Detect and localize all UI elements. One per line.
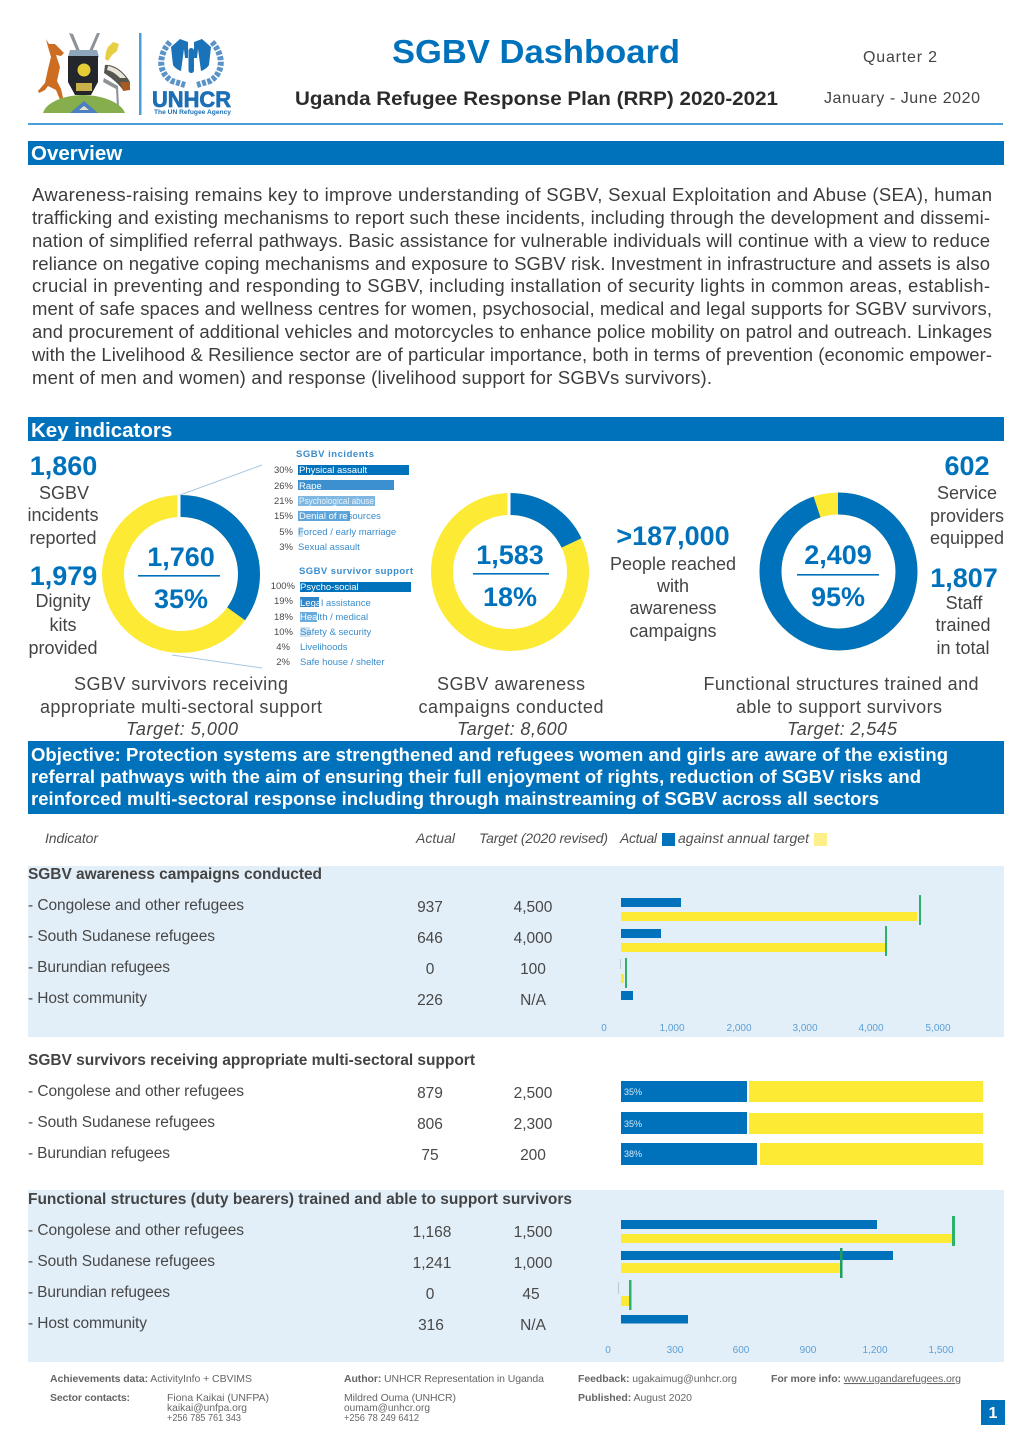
panel: awareness campaigns [28, 866, 1004, 1037]
caption: awareness: Target: 8,600 [457, 719, 567, 739]
caption: functional structures [704, 674, 978, 739]
chart: SGBV survivor support: SGBV survivor support [299, 566, 414, 577]
rows: awareness campaigns: - Host community [28, 990, 147, 1007]
chart: SGBV incidents: Physical assault [299, 465, 367, 476]
chart: SGBV incidents: 30% [274, 465, 294, 476]
chart: SGBV incidents: 26% [274, 481, 294, 492]
rows: survivors support: 200 [520, 1147, 546, 1164]
people reached indicator: >187,000 [616, 521, 730, 551]
bar chart: functional structures: 0 [605, 1345, 611, 1356]
right indicators: providers [930, 506, 1004, 526]
caption: functional structures: Target: 2,545 [787, 719, 898, 739]
chart: SGBV survivor support: Safety & security [300, 627, 372, 638]
donut: awareness campaigns 18%: 1,583 [476, 540, 544, 570]
footer credits: kaikai@unfpa.org [167, 1402, 247, 1414]
rows: awareness campaigns: 4,500 [514, 899, 553, 916]
chart: SGBV survivor support: 19% [274, 596, 294, 607]
objective banner: reinforced multi-sectoral response including through mainstreaming of SGBV across all sectors [31, 788, 879, 809]
chart: SGBV incidents: Psychological abuse [299, 496, 374, 507]
caption: survivors: Target: 5,000 [126, 719, 238, 739]
left indicators: provided [28, 638, 98, 658]
panel: functional structures [28, 1190, 1004, 1362]
chart: SGBV survivor support: 2% [276, 657, 291, 668]
rows: functional structures: - South Sudanese refugees [28, 1253, 215, 1270]
rows: awareness campaigns: - Burundian refugees [28, 959, 170, 976]
subtitle: Uganda Refugee Response Plan (RRP) 2020-2021 [295, 88, 778, 110]
objective banner: Objective: Protection systems are strengthened and refugees women and girls are aware of the existing [31, 744, 948, 765]
rows: awareness campaigns: 100 [520, 961, 546, 978]
chart: SGBV survivor support: Livelihoods [300, 642, 348, 653]
left indicators: Dignity [35, 591, 91, 611]
panel: survivors support: SGBV survivors receiving appropriate multi-sectoral support [28, 1052, 475, 1069]
rows: functional structures: 1,168 [413, 1224, 451, 1241]
chart: SGBV incidents [274, 449, 409, 553]
page header [38, 33, 980, 116]
chart: SGBV survivor support: Legal assistance [300, 598, 371, 609]
people reached indicator: People reached [610, 554, 736, 574]
quarter label: Quarter 2 [863, 49, 937, 66]
table header and legend [45, 830, 827, 846]
caption: awareness: campaigns conducted [418, 697, 604, 717]
bar chart: awareness campaigns: 2,000 [726, 1023, 752, 1034]
footer credits: Author: UNHCR Representation in Uganda [344, 1373, 544, 1385]
rows: awareness campaigns: N/A [520, 992, 547, 1009]
rows: functional structures: 0 [426, 1286, 435, 1303]
footer credits: Mildred Ouma (UNHCR) [344, 1392, 456, 1404]
left indicators: SGBV [39, 483, 89, 503]
people reached indicator: campaigns [629, 621, 717, 641]
footer credits: Published: August 2020 [578, 1392, 692, 1404]
rows: survivors support: 806 [417, 1116, 443, 1133]
chart: SGBV incidents: 21% [274, 496, 294, 507]
overview heading [28, 141, 1004, 165]
table header and legend: Indicator [45, 830, 99, 846]
donut: functional structures 95%: 95% [811, 582, 865, 612]
left indicators: 1,860 [30, 451, 97, 481]
overview text: reliance on negative coping mechanisms and exposure to SGBV risk. Investment in infrastructure and assets is also [32, 253, 990, 274]
footer credits: For more info: www.ugandarefugees.org [771, 1373, 961, 1385]
chart: SGBV survivor support: 4% [276, 642, 291, 653]
stacked bar chart: survivors support: 35% [624, 1087, 642, 1097]
rows: functional structures: 1,500 [514, 1224, 553, 1241]
donut: awareness campaigns 18% [442, 493, 578, 640]
rows: functional structures: - Congolese and other refugees [28, 1222, 244, 1239]
donut: survivors 35%: 35% [154, 584, 208, 614]
rows: survivors support: 879 [417, 1085, 443, 1102]
chart: SGBV incidents: SGBV incidents [296, 449, 374, 460]
stacked bar chart: survivors support [621, 1081, 983, 1165]
bar chart: awareness campaigns: 3,000 [792, 1023, 818, 1034]
table header and legend: Target (2020 revised) [479, 830, 608, 846]
rows: awareness campaigns: 646 [417, 930, 443, 947]
logo: Uganda coat of arms [38, 33, 130, 113]
bar chart: functional structures [605, 1216, 955, 1356]
rows: survivors support: 75 [421, 1147, 439, 1164]
bar chart: awareness campaigns: 4,000 [858, 1023, 884, 1034]
people reached indicator: awareness [629, 598, 717, 618]
connector lines [172, 465, 262, 668]
rows: awareness campaigns: - Congolese and other refugees [28, 897, 244, 914]
rows: functional structures: 1,241 [413, 1255, 451, 1272]
chart: SGBV survivor support: 18% [274, 612, 294, 623]
footer credits: Fiona Kaikai (UNFPA) [167, 1392, 269, 1404]
logo: UNHCR [152, 39, 232, 116]
overview text: and procurement of additional vehicles and motorcycles to enhance police mobility on patrol and outreach. Linkages [32, 321, 992, 342]
right indicators: Staff [946, 593, 983, 613]
title: SGBV Dashboard [392, 33, 680, 70]
donut: survivors 35%: 1,760 [147, 542, 215, 572]
rows: survivors support: 2,300 [514, 1116, 553, 1133]
overview text: trafficking and existing mechanisms to report such these incidents, including through the development and dissemi- [32, 207, 990, 228]
left indicators [27, 451, 99, 658]
objective banner [28, 741, 1004, 814]
donut: awareness campaigns 18%: 18% [483, 582, 537, 612]
overview text: ment of men and women) and response (livelihood support for SGBVs survivors). [32, 367, 712, 388]
footer credits [50, 1373, 961, 1424]
right indicators [930, 451, 1004, 658]
logo: UNHCR: UNHCR [152, 87, 231, 112]
left indicators: 1,979 [30, 561, 97, 591]
footer credits: Sector contacts: [50, 1392, 130, 1404]
rows: functional structures: - Burundian refugees [28, 1284, 170, 1301]
people reached indicator: with [656, 576, 689, 596]
bar chart: functional structures: 900 [800, 1345, 817, 1356]
chart: SGBV survivor support: 100% [271, 581, 296, 592]
donut: functional structures 95%: 2,409 [804, 540, 872, 570]
key indicators heading: Key indicators [31, 419, 172, 442]
rows: awareness campaigns: 937 [417, 899, 443, 916]
chart: SGBV incidents: 5% [279, 527, 294, 538]
caption: awareness: SGBV awareness [437, 674, 585, 694]
bar chart: functional structures: 300 [667, 1345, 684, 1356]
rows: functional structures: - Host community [28, 1315, 147, 1332]
footer credits: Achievements data: ActivityInfo + CBVIMS [50, 1373, 252, 1385]
rows: awareness campaigns: 0 [426, 961, 435, 978]
footer credits: Feedback: ugakaimug@unhcr.org [578, 1373, 737, 1385]
overview text: nation of simplified referral pathways. Basic assistance for vulnerable individuals will continue with a view to reduce [32, 230, 990, 251]
key indicators heading [28, 417, 1004, 442]
caption: survivors [40, 674, 322, 739]
overview text [31, 184, 992, 388]
left indicators: reported [29, 528, 97, 548]
right indicators: 602 [944, 451, 990, 481]
bar chart: awareness campaigns: 5,000 [925, 1023, 951, 1034]
overview text: with the Livelihood & Resilience sector are of particular importance, both in terms of prevention (economic empower- [31, 344, 992, 365]
right indicators: 1,807 [930, 563, 998, 593]
chart: SGBV incidents: 15% [274, 511, 294, 522]
rows: survivors support: 2,500 [514, 1085, 553, 1102]
chart: SGBV incidents: Rape [299, 481, 322, 492]
chart: SGBV survivor support: Health / medical [300, 612, 368, 623]
overview text: crucial in preventing and responding to SGBV, including installation of security lights in common areas, establish- [32, 275, 990, 296]
rows: survivors support: - South Sudanese refugees [28, 1114, 215, 1131]
rows: awareness campaigns [28, 897, 553, 1009]
overview text: ment of safe spaces and wellness centres for women, psychosocial, medical and legal supports for SGBV survivors, [32, 298, 992, 319]
rows: awareness campaigns: 226 [417, 992, 443, 1009]
rows: awareness campaigns: 4,000 [514, 930, 553, 947]
bar chart: awareness campaigns: 0 [601, 1023, 607, 1034]
donut: survivors 35% [113, 495, 249, 642]
rows: survivors support [28, 1083, 553, 1164]
chart: SGBV survivor support: Psycho-social [300, 582, 359, 593]
donut: functional structures 95% [770, 504, 906, 640]
rows: functional structures: 316 [418, 1317, 444, 1334]
footer credits: oumam@unhcr.org [344, 1402, 430, 1414]
chart: SGBV incidents: Sexual assault [298, 542, 360, 553]
stacked bar chart: survivors support: 35% [624, 1119, 642, 1129]
bar chart: functional structures: 1,500 [928, 1345, 954, 1356]
chart: SGBV survivor support [271, 566, 414, 668]
rows: functional structures: N/A [520, 1317, 547, 1334]
chart: SGBV incidents: Denial of resources [299, 511, 381, 522]
bar chart: functional structures: 1,200 [862, 1345, 888, 1356]
table header and legend: Actual [619, 830, 658, 846]
panel: awareness campaigns: SGBV awareness campaigns conducted [28, 866, 322, 883]
caption: survivors: appropriate multi-sectoral support [40, 697, 322, 717]
bar chart: functional structures: 600 [733, 1345, 750, 1356]
overview heading: Overview [31, 142, 122, 165]
rows: functional structures: 1,000 [514, 1255, 553, 1272]
rows: functional structures [28, 1222, 553, 1334]
logo: UNHCR: The UN Refugee Agency [154, 110, 232, 116]
left indicators: kits [50, 615, 76, 635]
chart: SGBV survivor support: Safe house / shelter [300, 657, 384, 668]
page number: 1 [989, 1405, 998, 1422]
objective banner: referral pathways with the aim of ensuring their full enjoyment of rights, reduction of SGBV risks and [31, 766, 921, 787]
left indicators: incidents [27, 505, 99, 525]
page number [981, 1400, 1005, 1425]
rows: survivors support: - Congolese and other refugees [28, 1083, 244, 1100]
chart: SGBV incidents: Forced / early marriage [298, 527, 396, 538]
footer credits: +256 78 249 6412 [344, 1412, 419, 1424]
caption: awareness [418, 674, 604, 739]
rows: functional structures: 45 [522, 1286, 540, 1303]
footer credits: +256 785 761 343 [167, 1412, 241, 1424]
table header and legend: Actual [415, 830, 456, 846]
caption: functional structures: able to support survivors [736, 697, 942, 717]
rows: awareness campaigns: - South Sudanese refugees [28, 928, 215, 945]
panel: survivors support [28, 1052, 983, 1165]
bar chart: awareness campaigns: 1,000 [659, 1023, 685, 1034]
period label: January - June 2020 [824, 90, 980, 107]
caption: functional structures: Functional structures trained and [704, 674, 978, 694]
right indicators: Service [937, 483, 997, 503]
right indicators: trained [935, 615, 991, 635]
panel: functional structures: Functional structures (duty bearers) trained and able to support survivors [28, 1191, 572, 1208]
table header and legend: against annual target [678, 830, 810, 846]
right indicators: in total [936, 638, 990, 658]
caption: survivors: SGBV survivors receiving [74, 674, 288, 694]
bar chart: awareness campaigns [601, 895, 951, 1034]
stacked bar chart: survivors support: 38% [624, 1149, 642, 1159]
logo divider [139, 33, 142, 115]
chart: SGBV incidents: 3% [279, 542, 294, 553]
chart: SGBV survivor support: 10% [274, 627, 294, 638]
overview text: Awareness-raising remains key to improve understanding of SGBV, Sexual Exploitation and Abuse (SEA), human [32, 184, 992, 205]
rows: survivors support: - Burundian refugees [28, 1145, 170, 1162]
right indicators: equipped [930, 528, 1004, 548]
people reached indicator [610, 521, 736, 641]
